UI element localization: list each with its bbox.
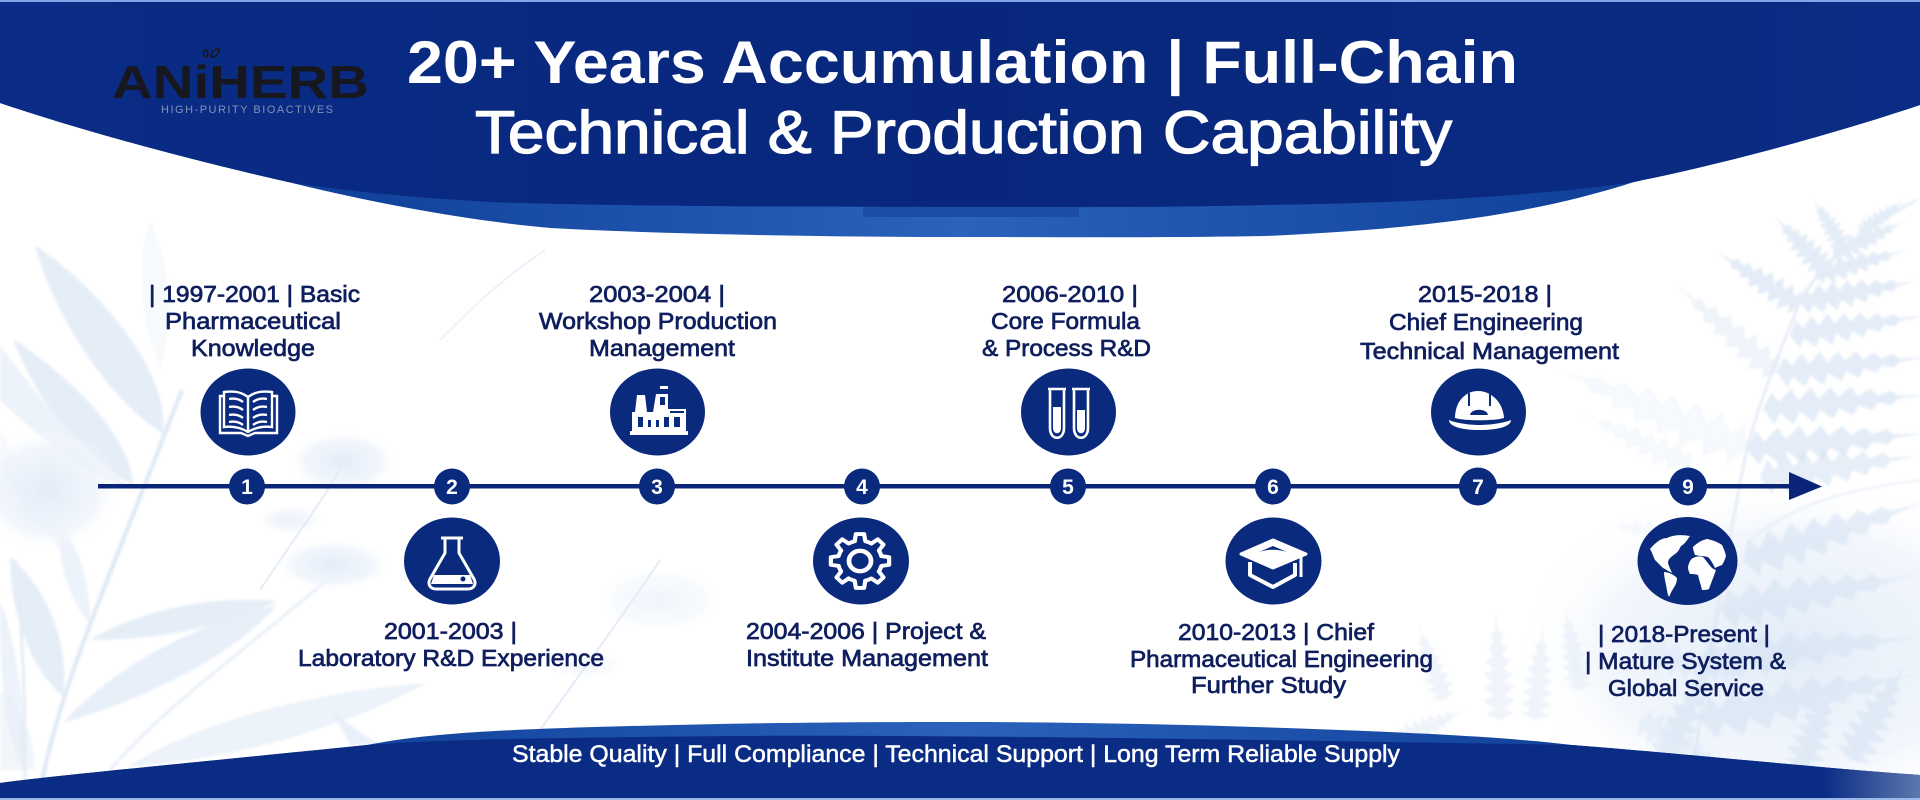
- step 2 marker: [434, 468, 470, 504]
- icon: open book: [200, 368, 296, 456]
- step 5 label: 2006-2010 |: [1002, 281, 1138, 307]
- title line 1: 20+ Years Accumulation | Full-Chain: [407, 29, 1518, 97]
- step 1 label: [149, 281, 360, 361]
- step 5 label: & Process R&D: [982, 335, 1151, 361]
- step 2 icon: flask: [404, 518, 500, 604]
- step 5 label: [982, 281, 1151, 361]
- step 3 label: [539, 281, 777, 361]
- footer dark navy shape: [0, 736, 1920, 800]
- step 7 label: [1360, 281, 1620, 364]
- footer lighter blue swoosh: [0, 722, 1920, 800]
- logo wordmark: ANiHERB: [112, 56, 369, 108]
- step 9 marker: [1669, 468, 1707, 506]
- step 7 label: 2015-2018 |: [1418, 281, 1552, 307]
- step 7 marker: [1459, 468, 1497, 506]
- step 1 marker: [229, 468, 265, 504]
- step 6 label: [1130, 619, 1433, 698]
- step 6 marker: 6: [1267, 476, 1279, 499]
- footer tagline: Stable Quality | Full Compliance | Technical Support | Long Term Reliable Supply: [512, 741, 1400, 768]
- step 4 marker: 4: [856, 476, 868, 499]
- step 1 marker: 1: [241, 476, 253, 499]
- icon: test tubes: [1021, 368, 1116, 456]
- header center tab: [863, 207, 1079, 217]
- step 4 icon: gear: [813, 518, 909, 604]
- step 3 marker: [639, 468, 675, 504]
- header dark navy shape: [0, 2, 1920, 207]
- step 1 label: | 1997-2001 | Basic: [149, 281, 360, 307]
- step 3 label: Management: [589, 335, 736, 361]
- step 9 label: | Mature System &: [1585, 648, 1786, 674]
- step 6 icon: graduation cap: [1226, 518, 1322, 604]
- background foliage: lower right fern: [1631, 436, 1920, 786]
- step 9 label: [1585, 621, 1786, 701]
- logo tagline: HIGH-PURITY BIOACTIVES: [161, 104, 333, 116]
- step 2 label: [298, 618, 604, 671]
- step 3 label: Workshop Production: [539, 308, 777, 334]
- step 5 marker: 5: [1062, 476, 1074, 499]
- step 6 label: 2010-2013 | Chief: [1178, 619, 1375, 645]
- step 9 label: Global Service: [1608, 675, 1764, 701]
- step 2 marker: 2: [446, 476, 458, 499]
- header band: [0, 0, 1920, 237]
- step 7 label: Chief Engineering: [1389, 309, 1583, 335]
- logo: AniHerb: [112, 49, 369, 116]
- icon: hard hat: [1431, 368, 1526, 456]
- background foliage: left plant: [0, 220, 427, 790]
- step 7 marker: 7: [1472, 476, 1484, 499]
- step 1 label: Pharmaceutical: [165, 308, 341, 334]
- step 4 label: 2004-2006 | Project &: [746, 618, 986, 644]
- icon: factory: [610, 368, 705, 456]
- timeline axis with arrow: [98, 472, 1822, 500]
- footer band: [0, 722, 1920, 800]
- step 5 label: Core Formula: [991, 308, 1140, 334]
- step 4 label: [746, 618, 989, 671]
- step 3 label: 2003-2004 |: [589, 281, 725, 307]
- step 4 marker: [844, 468, 880, 504]
- step 1 label: Knowledge: [191, 335, 315, 361]
- step 9 marker: 9: [1682, 476, 1694, 499]
- step 2 label: 2001-2003 |: [384, 618, 517, 644]
- footer bottom highlight: [0, 798, 1920, 800]
- background foliage: main fern: [1544, 192, 1920, 790]
- step 3 marker: 3: [651, 476, 663, 499]
- logo leaf icon: [203, 49, 219, 57]
- step 4 label: Institute Management: [746, 645, 989, 671]
- step 5 marker: [1050, 468, 1086, 504]
- step 6 label: Pharmaceutical Engineering: [1130, 646, 1433, 672]
- background foliage: small center fern: [1394, 604, 1594, 753]
- header lighter blue swoosh: [0, 2, 1920, 237]
- step 6 label: Further Study: [1191, 672, 1347, 698]
- step 9 label: | 2018-Present |: [1598, 621, 1770, 647]
- background foliage: seed head: [0, 428, 120, 552]
- background foliage: mid-left sprigs: [258, 250, 725, 730]
- step 7 label: Technical Management: [1360, 338, 1620, 364]
- step 2 label: Laboratory R&D Experience: [298, 645, 604, 671]
- background foliage: lower right tint: [1520, 480, 1920, 800]
- title line 2: Technical & Production Capability: [475, 99, 1452, 166]
- step 9 icon: globe: [1638, 517, 1738, 605]
- header top highlight: [0, 0, 1920, 2]
- title: [407, 29, 1518, 166]
- step 6 marker: [1255, 468, 1291, 504]
